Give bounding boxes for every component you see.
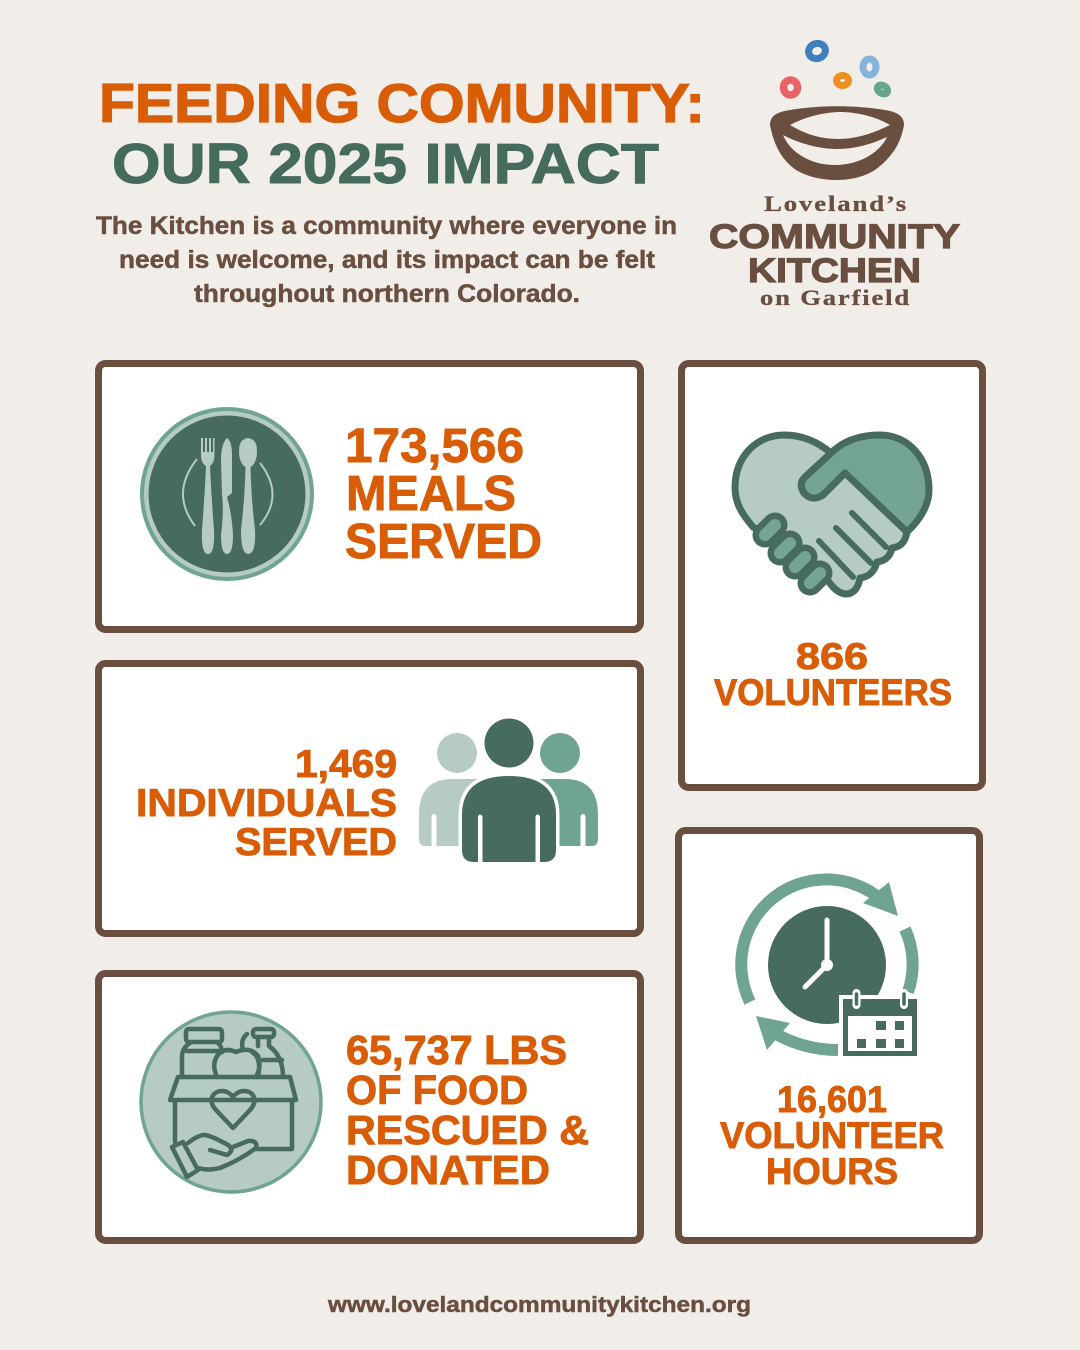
stat: food: RESCUED &: [346, 1107, 589, 1153]
stat: hours: 16,601: [777, 1079, 887, 1120]
stat: meals: [345, 420, 542, 569]
stat: meals: 173,566: [345, 420, 524, 473]
stat: food: 65,737 LBS: [346, 1027, 567, 1073]
stat: hours: VOLUNTEER: [720, 1115, 944, 1156]
stat: volunteers: 866: [796, 636, 868, 677]
stat: individuals: SERVED: [235, 821, 397, 864]
icon: group of people: [419, 718, 598, 862]
stat: individuals: INDIVIDUALS: [136, 782, 397, 825]
panel: individuals served: [98, 664, 640, 934]
intro text: throughout northern Colorado.: [194, 280, 580, 308]
footer website: www.lovelandcommunitykitchen.org: [327, 1292, 751, 1317]
icon: food box held by a hand: [141, 1012, 321, 1192]
stat: individuals: [136, 743, 397, 864]
stat: hours: [720, 1079, 944, 1192]
logo rings: [784, 41, 889, 96]
logo: Loveland's Community Kitchen on Garfield: [709, 41, 960, 310]
logo wordmark: [709, 191, 960, 310]
logo wordmark: COMMUNITY: [709, 218, 960, 256]
stat: food: DONATED: [346, 1147, 550, 1193]
stat: food: [346, 1027, 589, 1193]
title: OUR 2025 IMPACT: [112, 132, 659, 196]
icon: plate and cutlery: [140, 407, 314, 581]
stat: food: OF FOOD: [346, 1067, 528, 1113]
icon: handshake heart: [735, 435, 929, 594]
panel: volunteer hours: [678, 830, 980, 1240]
panel: meals served: [98, 364, 640, 630]
title: [99, 73, 705, 196]
stat: volunteers: VOLUNTEERS: [714, 672, 952, 713]
intro text: [96, 212, 677, 308]
panel: volunteers: [682, 364, 982, 788]
logo bowl: [770, 106, 904, 180]
logo wordmark: on Garfield: [760, 285, 911, 310]
title: FEEDING COMUNITY:: [99, 73, 705, 134]
stat: individuals: 1,469: [295, 743, 397, 786]
stat: meals: SERVED: [345, 515, 542, 569]
stat: hours: HOURS: [766, 1151, 898, 1192]
stat: meals: MEALS: [346, 467, 516, 521]
intro text: The Kitchen is a community where everyone in: [96, 212, 677, 240]
panel: food rescued: [98, 974, 640, 1240]
logo wordmark: Loveland’s: [764, 191, 908, 216]
logo wordmark: KITCHEN: [748, 252, 921, 290]
intro text: need is welcome, and its impact can be felt: [119, 246, 656, 274]
stat: volunteers: [714, 636, 952, 713]
icon: clock with calendar: [741, 879, 917, 1056]
